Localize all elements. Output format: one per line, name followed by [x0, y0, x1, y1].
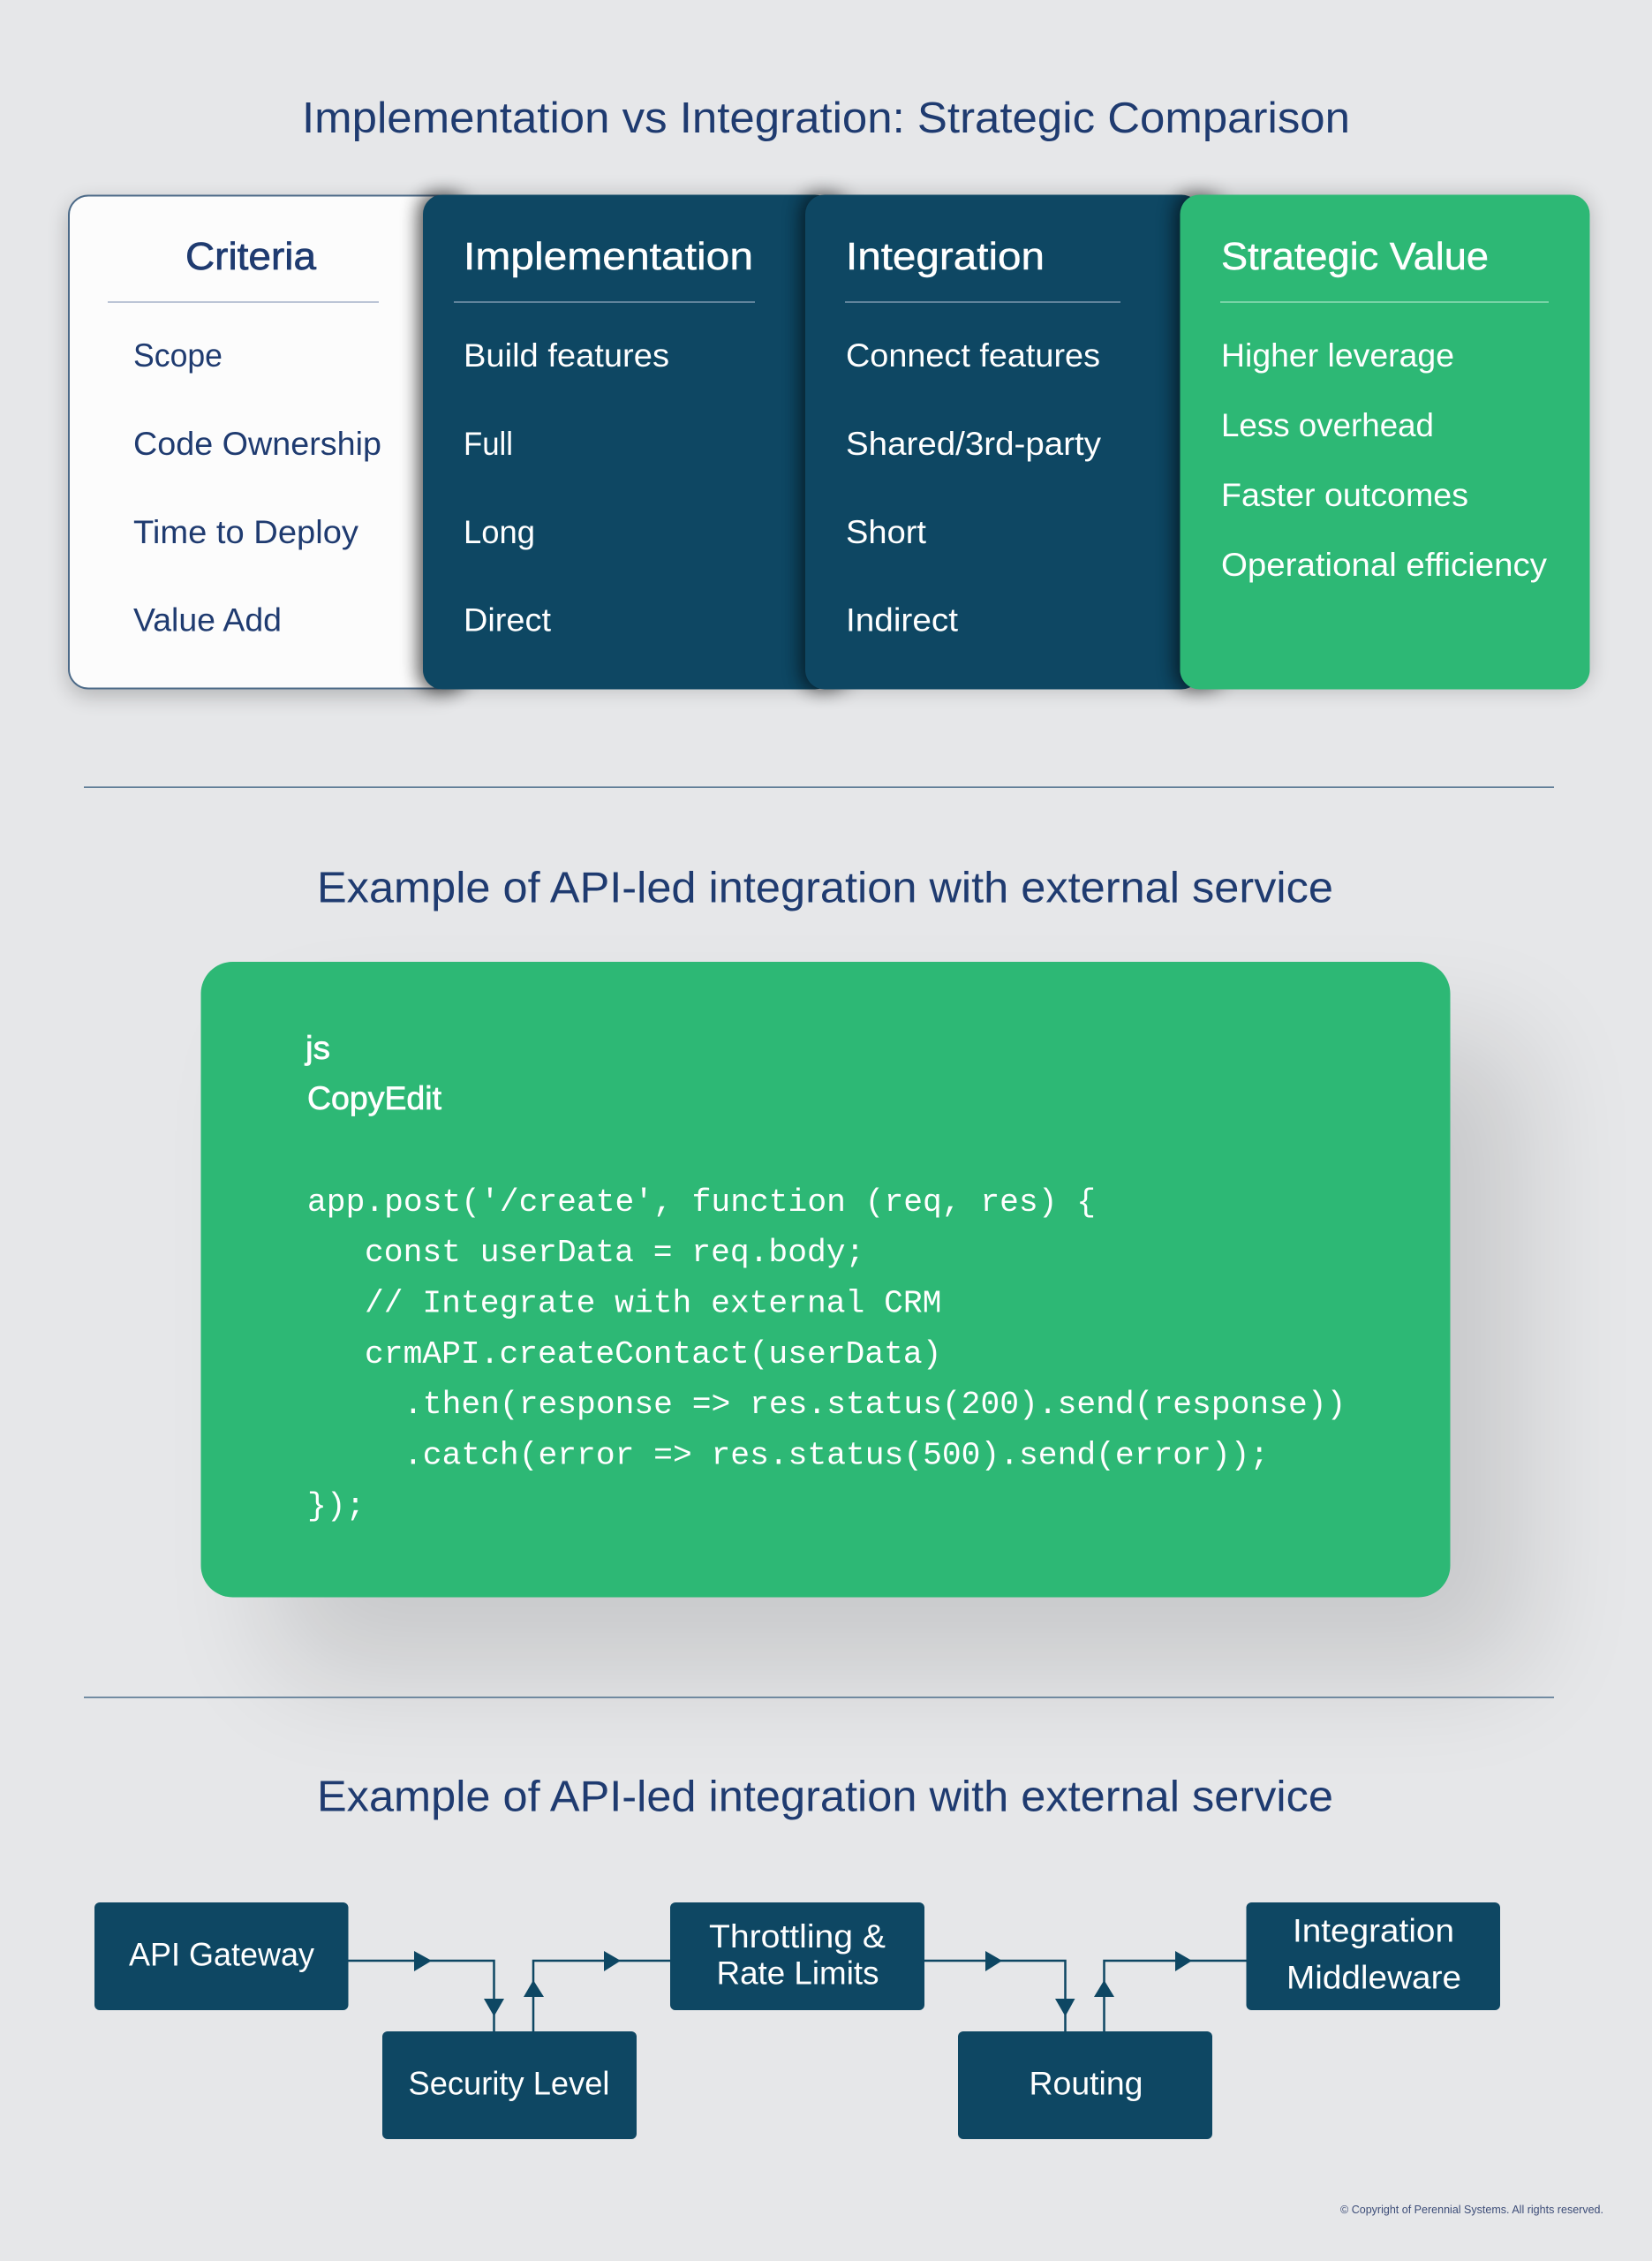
- panel: implementation: Long: [464, 513, 535, 550]
- box: API Gateway: API Gateway: [129, 1936, 314, 1973]
- box: Throttling and Rate Limits: [670, 1902, 924, 2010]
- arrow: throttling to routing: [924, 1951, 1075, 2031]
- copyright note: © Copyright of Perennial Systems. All rights reserved.: [1340, 2204, 1603, 2216]
- panel: strategic value: Strategic Value: [1221, 235, 1489, 278]
- panel: code example: app.post('/create', function (req, res) {: [307, 1184, 1096, 1221]
- box: API Gateway: [94, 1902, 348, 2010]
- panel: code example: const userData = req.body;: [365, 1235, 864, 1271]
- panel: integration: Connect features: [846, 337, 1100, 374]
- panel: code example: // Integrate with external CRM: [365, 1286, 941, 1321]
- panel: code example: .then(response => res.status(200).send(response)): [404, 1387, 1346, 1423]
- heading: code example: Example of API-led integration with external service: [317, 864, 1333, 911]
- panel: criteria: [68, 196, 457, 696]
- panel: implementation: [419, 193, 834, 691]
- arrow: routing to middleware: [1094, 1951, 1247, 2031]
- box: Throttling and Rate Limits: Throttling &: [709, 1917, 886, 1955]
- panel: integration: Indirect: [846, 601, 959, 638]
- box: Security Level: [382, 2031, 637, 2139]
- panel: strategic value: [1175, 193, 1589, 691]
- box: Integration Middleware: Integration: [1293, 1911, 1454, 1948]
- panel: integration: Integration: [846, 235, 1045, 278]
- heading: flow diagram: Example of API-led integration with external service: [317, 1773, 1333, 1821]
- arrow: security to throttling: [524, 1951, 670, 2031]
- flow diagram: [94, 1902, 1500, 2139]
- panel: strategic value: Operational efficiency: [1221, 546, 1547, 583]
- panel: code example: crmAPI.createContact(userData): [365, 1336, 941, 1372]
- box: Throttling and Rate Limits: Rate Limits: [717, 1954, 879, 1991]
- panel: code example: });: [307, 1488, 365, 1524]
- panel: implementation: Build features: [464, 337, 669, 374]
- panel: criteria: Code Ownership: [133, 425, 381, 462]
- panel: implementation: Implementation: [464, 235, 753, 278]
- panel: integration: [801, 193, 1201, 691]
- box: Security Level: Security Level: [408, 2065, 609, 2102]
- panel: code example: CopyEdit: [307, 1079, 442, 1116]
- box: Integration Middleware: [1247, 1902, 1500, 2010]
- panel: criteria: Criteria: [185, 235, 317, 278]
- panel: implementation: Direct: [464, 601, 552, 638]
- box: Routing: [958, 2031, 1212, 2139]
- comparison table: [68, 193, 1589, 696]
- arrow: gateway to security: [348, 1951, 504, 2031]
- box: Routing: Routing: [1030, 2065, 1143, 2102]
- panel: criteria: Time to Deploy: [133, 513, 358, 550]
- panel: strategic value: Less overhead: [1221, 406, 1434, 443]
- panel: criteria: Value Add: [133, 601, 282, 638]
- panel: strategic value: Higher leverage: [1221, 337, 1454, 374]
- box: Integration Middleware: Middleware: [1286, 1959, 1461, 1996]
- panel: criteria: Scope: [133, 337, 223, 374]
- panel: integration: Shared/3rd-party: [846, 425, 1101, 462]
- panel: code example: .catch(error => res.status(500).send(error));: [404, 1438, 1269, 1473]
- panel: code example: js: [305, 1029, 330, 1066]
- panel: implementation: Full: [464, 425, 513, 462]
- title: Implementation vs Integration: Strategic Comparison: [302, 95, 1350, 142]
- panel: strategic value: Faster outcomes: [1221, 476, 1468, 513]
- panel: integration: Short: [846, 513, 927, 550]
- panel: code example: [201, 962, 1526, 1673]
